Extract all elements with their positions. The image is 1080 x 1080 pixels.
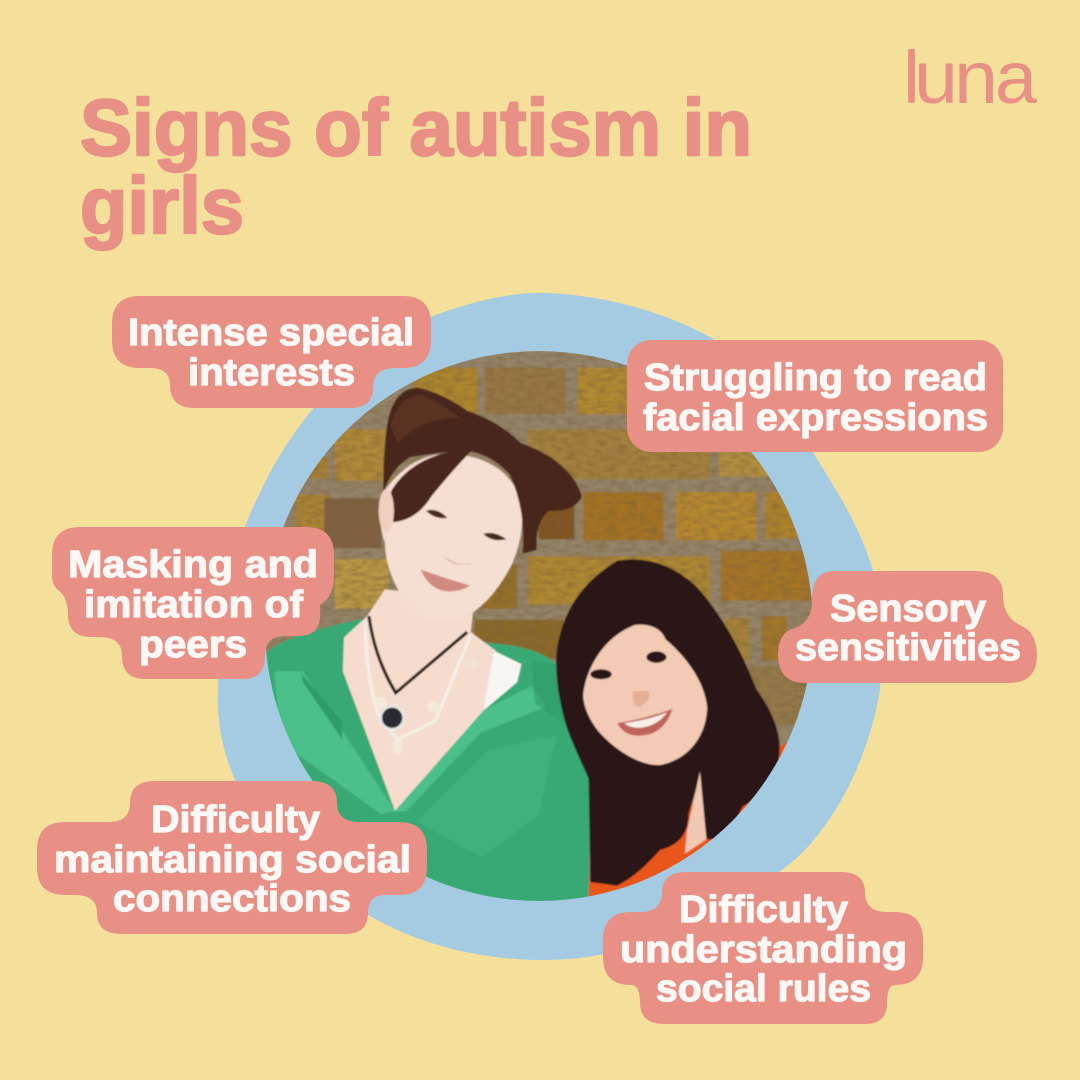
label: masking and imitation of peers: peers bbox=[139, 624, 247, 666]
label: struggling to read facial expressions: Struggling to read bbox=[644, 357, 987, 399]
label: intense special interests: interests bbox=[188, 352, 355, 394]
label: masking and imitation of peers bbox=[52, 527, 334, 679]
label: difficulty maintaining social connections bbox=[37, 781, 427, 934]
title: girls bbox=[80, 161, 244, 250]
label: sensory sensitivities bbox=[778, 571, 1037, 683]
label: sensory sensitivities: Sensory bbox=[830, 588, 986, 630]
logo: luna: l bbox=[903, 36, 920, 119]
label: intense special interests: Intense special bbox=[128, 312, 414, 354]
label: intense special interests bbox=[112, 296, 431, 408]
logo: luna: n bbox=[954, 36, 998, 119]
label: difficulty maintaining social connections: Difficulty bbox=[151, 799, 320, 841]
label: struggling to read facial expressions bbox=[627, 340, 1003, 452]
label: difficulty maintaining social connections: connections bbox=[113, 878, 351, 920]
label: masking and imitation of peers: Masking and bbox=[68, 544, 318, 586]
title: Signs of autism in bbox=[80, 83, 752, 172]
brick wall bbox=[260, 350, 820, 910]
label: difficulty understanding social rules bbox=[603, 872, 923, 1024]
girl one: green hoodie bbox=[260, 387, 590, 910]
hair bbox=[383, 387, 582, 554]
girl two: dark hair, orange top bbox=[556, 559, 796, 910]
photo: two girls against a brick wall bbox=[260, 350, 820, 910]
logo: luna: u bbox=[914, 36, 958, 119]
label: difficulty maintaining social connections: maintaining social bbox=[54, 839, 411, 881]
label: struggling to read facial expressions: facial expressions bbox=[643, 397, 988, 439]
necklaces bbox=[365, 616, 478, 754]
label: difficulty understanding social rules: social rules bbox=[656, 968, 871, 1010]
label: masking and imitation of peers: imitation of bbox=[84, 584, 303, 626]
face details bbox=[421, 510, 506, 592]
face details bbox=[590, 651, 672, 736]
logo: luna: a bbox=[995, 36, 1038, 119]
label: difficulty understanding social rules: Difficulty bbox=[679, 889, 848, 931]
label: sensory sensitivities: sensitivities bbox=[795, 627, 1021, 669]
label: difficulty understanding social rules: understanding bbox=[620, 929, 907, 971]
title bbox=[80, 83, 752, 250]
blue blob bbox=[218, 293, 881, 960]
logo: luna bbox=[903, 36, 1038, 119]
